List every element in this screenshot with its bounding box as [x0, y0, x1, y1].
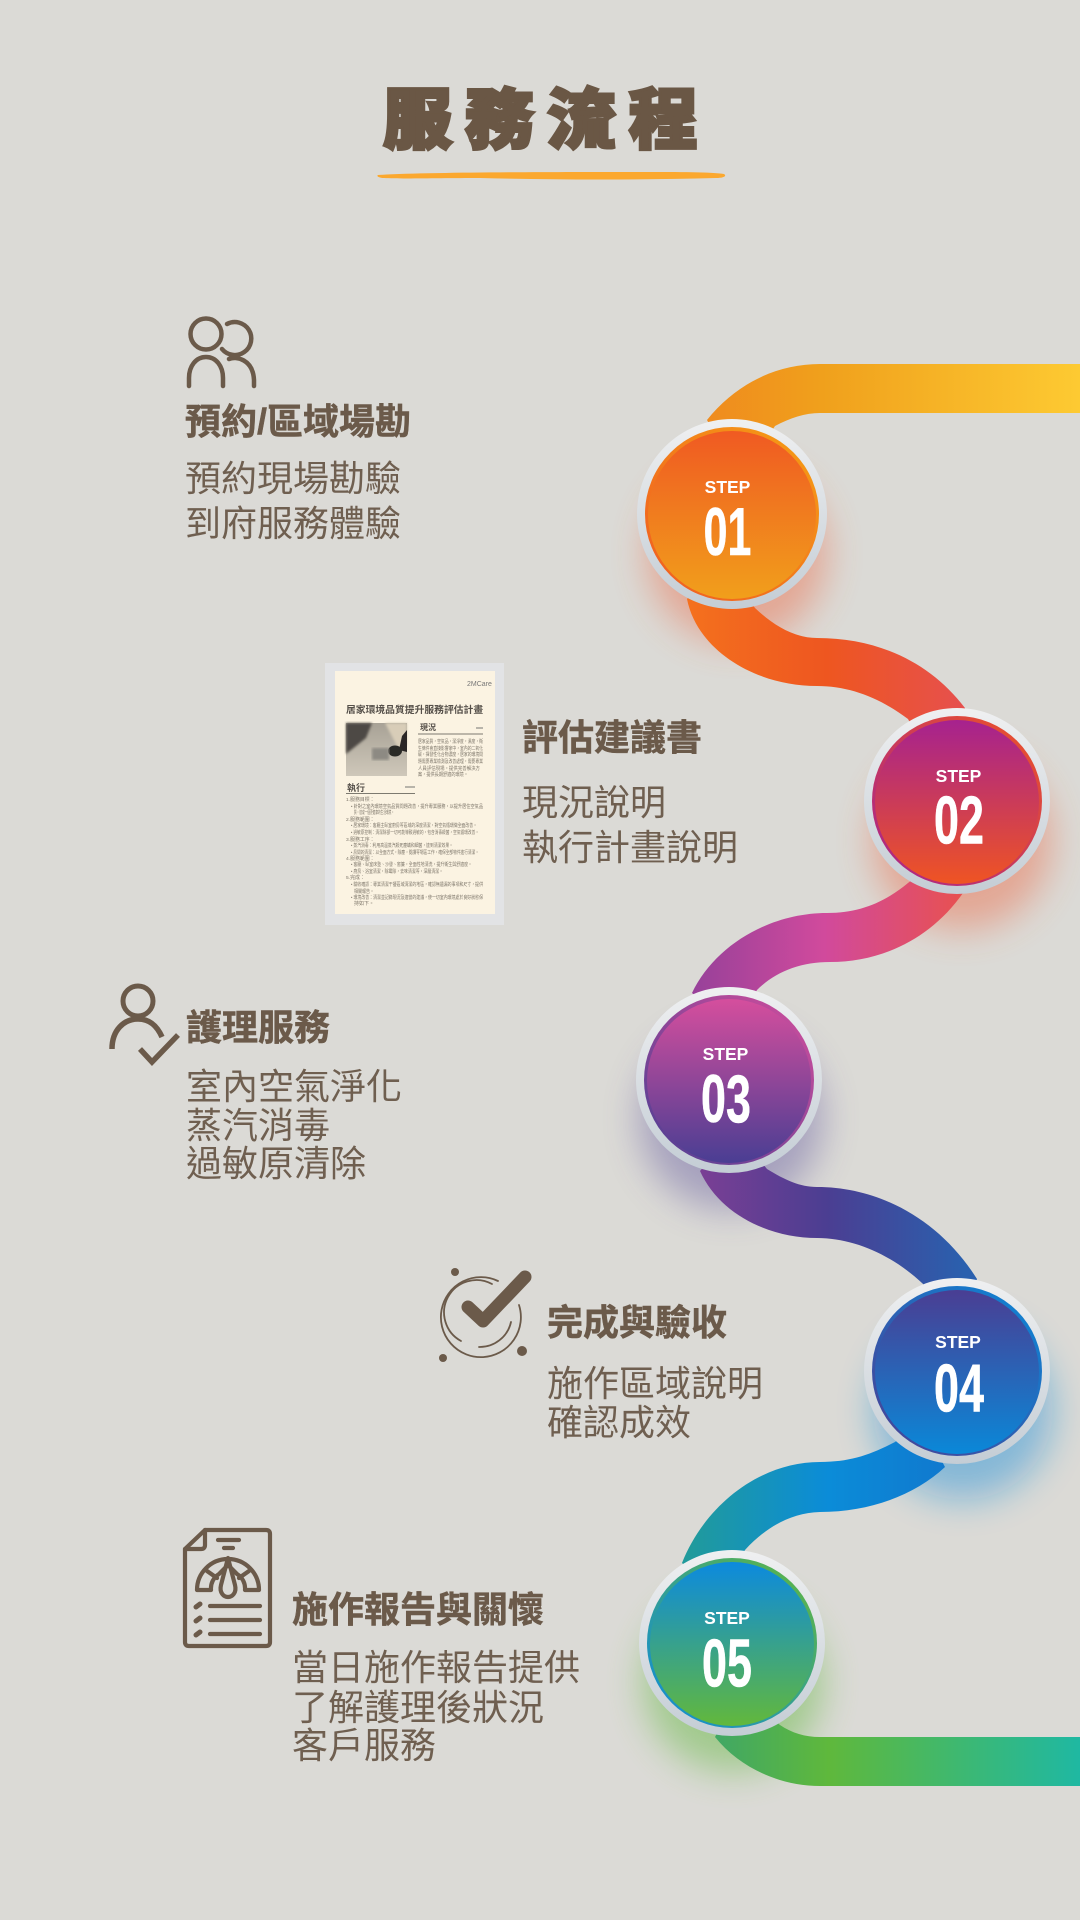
text block: step 2: 執行計畫說明 — [522, 827, 738, 868]
evaluation report thumbnail: 3.服務工序： — [346, 836, 375, 843]
evaluation report thumbnail: 1.服務目標： — [346, 796, 375, 803]
ribbon segment: step 3 to step 4 — [700, 1130, 977, 1320]
ribbon segment: exit from step 5 — [715, 1690, 1080, 1786]
text block: step 3: 護理服務 — [186, 1007, 330, 1048]
evaluation report thumbnail: • 廚房、浴室清潔，除霉除，去味清潔等，深層清潔。 — [351, 868, 443, 875]
text block: step 1: 預約現場勘驗 — [185, 458, 401, 499]
step 01 badge: 01 — [704, 495, 751, 571]
evaluation report thumbnail: • 環境改善：清潔並記錄現況及適當的建議，使一切室內環境處於良好狀態保 — [351, 894, 483, 901]
evaluation report thumbnail: • 房間的清潔：以全面方式，除塵，閱讀等場區工作，確保全部物件進行清潔。 — [351, 849, 479, 856]
text block: step 1: 預約/區域場勘 — [185, 401, 411, 442]
step 02 badge: STEP — [936, 766, 982, 786]
text block: step 1 — [185, 401, 411, 544]
evaluation report thumbnail: • 驗收確認：專業清潔干擾區域清潔的地區，確認無遺漏的事項和尺寸，提供 — [351, 881, 483, 888]
step 03 badge — [636, 987, 822, 1173]
icon: report with gauge — [185, 1530, 270, 1646]
report photo — [346, 723, 407, 776]
ribbon segment: step 4 to step 5 — [682, 1420, 945, 1600]
text block: step 4: 施作區域說明 — [547, 1363, 763, 1404]
evaluation report thumbnail: 碳，揮發性化合物濃度，居家的環境問 — [418, 751, 483, 758]
text block: step 3: 室內空氣淨化 — [186, 1066, 402, 1107]
step 05 badge: STEP — [704, 1608, 750, 1628]
evaluation report thumbnail: 居家環境品質提升服務評估計畫 — [346, 703, 483, 716]
evaluation report thumbnail — [325, 663, 504, 925]
step 05 badge — [639, 1550, 825, 1736]
evaluation report thumbnail: 案，提供長期舒適的環境。 — [418, 771, 468, 778]
evaluation report thumbnail: • 蒸汽消毒：利用高溫蒸汽殺死塵蟎和細菌，達到清潔效果。 — [351, 842, 453, 849]
text block: step 5 — [292, 1589, 580, 1766]
text block: step 2: 現況說明 — [522, 782, 666, 823]
step 02 badge: 02 — [934, 783, 984, 859]
text block: step 4: 確認成效 — [547, 1402, 691, 1443]
title underline — [377, 172, 725, 180]
ribbon segment: step 2 to step 3 — [692, 850, 963, 1030]
step 05 badge: 05 — [702, 1626, 752, 1702]
evaluation report thumbnail: 題需要專業檢測及改善處理，需要專業 — [418, 758, 483, 765]
step 04 badge: STEP — [935, 1332, 981, 1352]
evaluation report thumbnail: 執行 — [347, 782, 365, 793]
text block: step 4: 完成與驗收 — [547, 1302, 727, 1343]
ribbon segment: entry to step 1 — [707, 364, 1080, 480]
icon: two people — [189, 318, 254, 386]
text block: step 3: 蒸汽消毒 — [186, 1105, 330, 1146]
evaluation report thumbnail: 人員評估現場，提供完善解決方 — [418, 765, 480, 772]
step 01 badge: STEP — [705, 477, 751, 497]
step glows — [639, 463, 1053, 1772]
step 02 badge — [864, 708, 1050, 894]
step 04 badge — [864, 1278, 1050, 1464]
ribbon segment: step 1 to step 2 — [687, 560, 965, 760]
text block: step 5: 施作報告與關懷 — [292, 1589, 544, 1630]
evaluation report thumbnail: • 居家環境：客廳主臥室廚房等區域的深度清潔，對空氣循環做全面改善。 — [351, 822, 477, 829]
text block: step 1: 到府服務體驗 — [185, 503, 401, 544]
text block: step 3: 過敏原清除 — [186, 1143, 366, 1184]
text block: step 2: 評估建議書 — [522, 717, 702, 758]
evaluation report thumbnail: 2MCare — [467, 681, 492, 688]
text block: step 5: 了解護理後狀況 — [292, 1687, 544, 1728]
evaluation report thumbnail: 5.完成： — [346, 874, 365, 881]
evaluation report thumbnail: 持如下。 — [354, 900, 374, 907]
text block: step 3 — [186, 1007, 402, 1184]
evaluation report thumbnail: 居家品質，空氣品，潔淨度，濕度，衛 — [418, 738, 483, 745]
step 01 badge — [637, 419, 827, 609]
evaluation report thumbnail: 2.服務範圍： — [346, 816, 375, 823]
step 03 badge: STEP — [703, 1044, 749, 1064]
text block: step 2 — [522, 717, 738, 868]
evaluation report thumbnail: 相關報告。 — [354, 888, 374, 895]
text block: step 4 — [547, 1302, 763, 1443]
text block: step 5: 當日施作報告提供 — [292, 1647, 580, 1688]
evaluation report thumbnail: 質，達成一個更健康的生活環境。 — [354, 809, 394, 816]
ribbon path connecting the steps — [682, 364, 1080, 1786]
title: 服務流程 — [383, 84, 711, 158]
evaluation report thumbnail: 生條件會直接影響家中，室內的二氧化 — [418, 745, 483, 752]
step 03 badge: 03 — [701, 1062, 751, 1137]
icon: person with check mark — [112, 986, 178, 1062]
evaluation report thumbnail: 4.服務範圍： — [346, 855, 375, 862]
evaluation report thumbnail: • 針對之室內環境空氣品質問題改善，提升專業服務，以提升居住空氣品 — [351, 803, 483, 810]
icon: circled check mark — [439, 1268, 527, 1362]
text block: step 5: 客戶服務 — [292, 1725, 436, 1766]
evaluation report thumbnail: • 客廳、臥室床墊、沙發、窗簾，全面性地清洗，提升衛生與舒適度。 — [351, 861, 472, 868]
evaluation report thumbnail: • 過敏原控制：清潔除卻一切可能導致過敏的，包含消毒殺菌，空氣循環改善。 — [351, 829, 479, 836]
evaluation report thumbnail: 現況 — [420, 722, 436, 732]
step 04 badge: 04 — [934, 1351, 984, 1427]
